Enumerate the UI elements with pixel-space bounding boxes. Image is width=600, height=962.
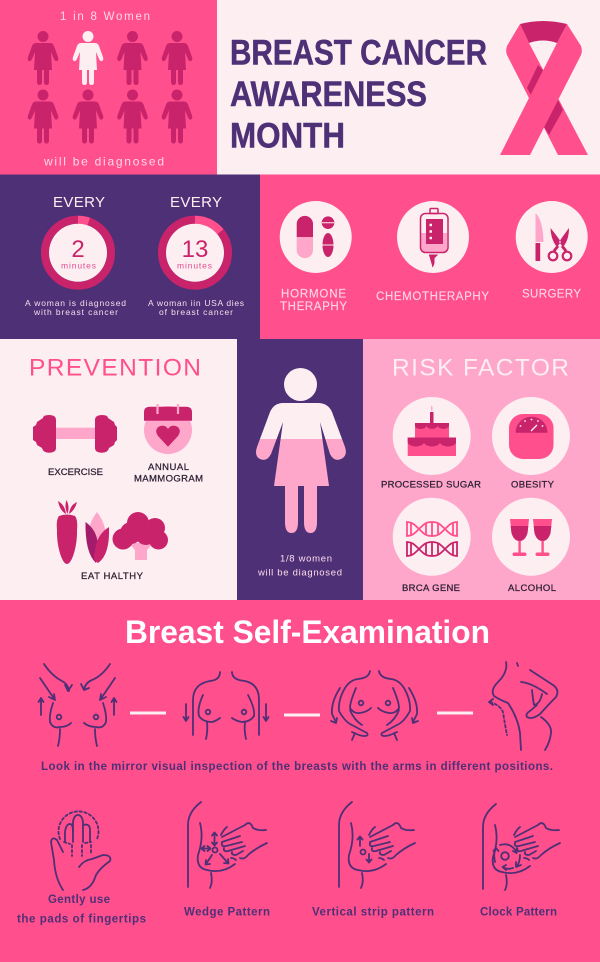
stat: every 13 minutes: minutes [177,260,212,270]
panel: 1 in 8 women [0,0,217,174]
treatment: chemotherapy: CHEMOTHERAPHY [376,291,489,303]
panel: 1/8 women figure [237,339,363,600]
caption: will be diagnosed: will be diagnosed [43,154,164,168]
stat: every 2 minutes: EVERY [53,194,105,211]
icon: large woman figure [256,368,346,533]
stat: every 2 minutes: with breast cancer [33,307,118,317]
label: obesity: OBESITY [511,480,555,491]
stat: every 13 minutes: EVERY [170,194,222,211]
icon: clock pattern [483,804,560,890]
label: eat healthy: EAT HALTHY [81,571,144,582]
label: vertical strip pattern: Vertical strip pattern [312,907,434,919]
panel: statistics [0,174,260,339]
label: annual mammogram [134,462,203,485]
icon: DNA [393,498,471,576]
treatment: hormone therapy: HORMONE [281,289,346,301]
icon: corn [85,512,109,563]
heading: prevention: PREVENTION [29,355,201,382]
treatment: surgery: SURGERY [522,289,581,301]
icon: step 1, arms raised [38,664,116,746]
icon: pink ribbon [500,21,588,155]
text: mirror inspection instruction: Look in the mirror visual inspection of the breasts with the arms in different positions. [41,761,553,773]
caption: 1/8 women will be diagnosed: will be diagnosed [257,568,342,579]
label: annual mammogram: ANNUAL [148,462,189,473]
heading: 1 in 8 women: 1 in 8 Women [60,11,150,23]
panel: treatments [260,174,600,339]
label: exercise: EXCERCISE [48,467,103,478]
heading: breast self-examination: Breast Self-Examination [125,614,490,650]
stat: every 2 minutes [25,194,126,317]
icon: step 2, arms lowered [184,672,268,739]
panel: breast self-examination [0,600,600,962]
stat: every 13 minutes: 13 [182,236,208,263]
icon: weighing scale [492,397,570,475]
icon: wedge pattern [188,802,267,888]
treatment: hormone therapy [280,201,352,313]
panel: prevention [0,339,237,600]
stat: every 13 minutes: of breast cancer [159,307,233,317]
label: BRCA gene: BRCA GENE [402,583,460,594]
divider: dash 3 [437,712,473,714]
stat: every 2 minutes: A woman is diagnosed [25,298,126,308]
caption: 1/8 women will be diagnosed: 1/8 women [280,554,332,565]
stat: every 13 minutes: A woman iin USA dies [148,298,244,308]
title: AWARENESS [230,75,427,114]
caption: 1/8 women will be diagnosed [257,554,342,579]
title: MONTH [230,116,345,156]
panel: title [217,0,600,174]
stat: every 13 minutes [148,194,244,317]
icon: step 4, side profile [489,662,557,750]
icon: step 3, hands on hips [331,671,418,740]
divider: dash 1 [130,712,166,714]
heading: risk factor: RISK FACTOR [392,355,569,382]
stat: every 2 minutes: minutes [61,260,96,270]
title: BREAST CANCER [230,34,487,72]
icon grid: eight women, one highlighted [28,31,192,144]
icon: wine glasses [492,498,570,576]
treatment: hormone therapy: THERAPHY [280,301,347,313]
label: clock pattern: Clock Pattern [480,907,557,919]
icon: calendar with heart [144,404,192,454]
label: gently use the pads of fingertips: Gently use [48,894,110,906]
label: annual mammogram: MAMMOGRAM [134,474,203,485]
title [230,34,487,156]
icon: hand with fingertip pads [51,811,110,890]
label: alcohol: ALCOHOL [508,583,556,594]
label: gently use the pads of fingertips: the pads of fingertips [17,914,146,926]
icon: cake [393,397,471,475]
treatment: chemotherapy [376,201,489,303]
label: gently use the pads of fingertips [17,894,146,926]
treatment: surgery [516,201,588,301]
panel: risk factor [363,339,600,600]
icon: vertical strip pattern [339,802,415,888]
stat: every 2 minutes: 2 [71,236,85,263]
divider: dash 2 [284,714,320,716]
label: wedge pattern: Wedge Pattern [184,907,270,919]
label: processed sugar: PROCESSED SUGAR [381,480,481,491]
icon: dumbbell [33,415,117,453]
icon: carrot [57,500,77,564]
icon: broccoli [112,512,168,560]
